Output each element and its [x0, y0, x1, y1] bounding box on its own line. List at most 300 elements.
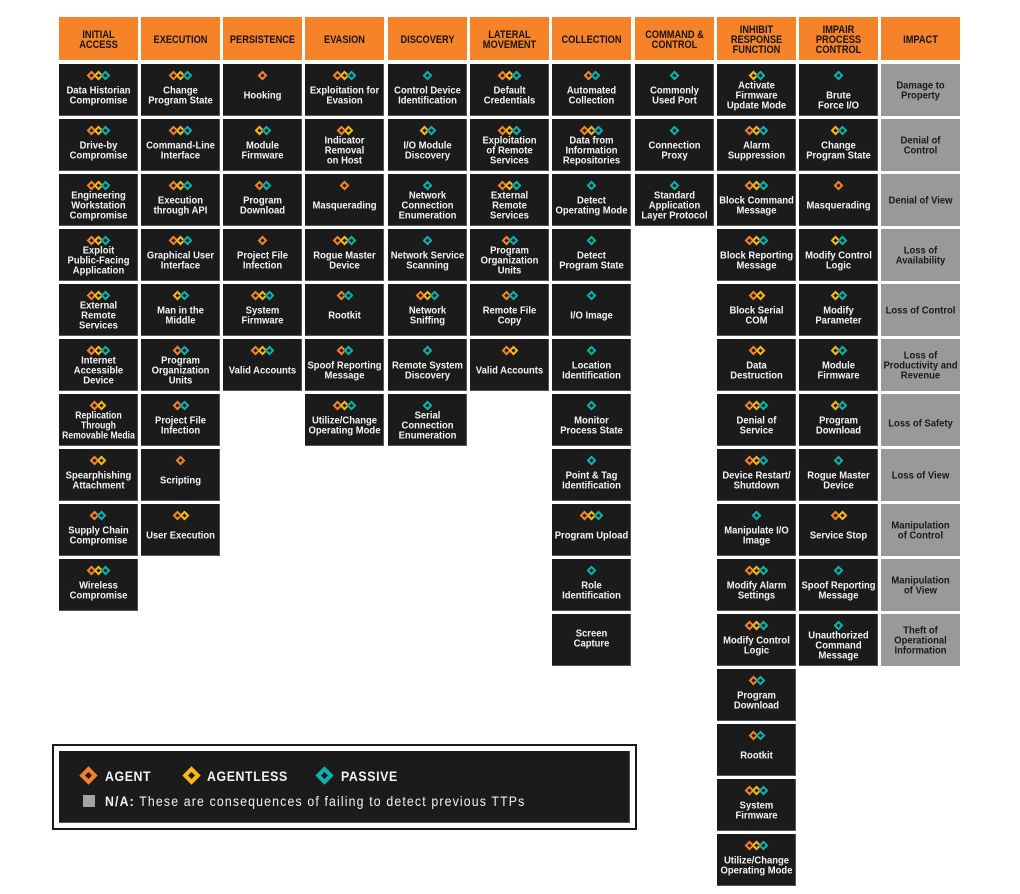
label — [69, 190, 128, 222]
technique: Standard Application Layer Protocol — [635, 174, 714, 226]
technique: Rogue Master Device — [305, 229, 384, 281]
label: Project File — [237, 250, 288, 262]
label: Modify Control — [805, 250, 872, 262]
icons: agent, passive — [470, 235, 549, 245]
technique: Program Download — [799, 394, 878, 446]
header: Command & Control — [635, 17, 714, 60]
label: External — [80, 300, 117, 312]
icons: passive — [388, 400, 467, 410]
technique: Service Stop — [799, 504, 878, 556]
icons: agent, agentless, passive — [470, 180, 549, 190]
consequence: Theft of Operational Information — [881, 614, 960, 666]
label — [878, 350, 964, 380]
technique: Scripting — [141, 449, 220, 501]
technique: Unauthorized Command Message — [799, 614, 878, 666]
label: Removal — [325, 144, 364, 156]
label: Interface — [161, 260, 200, 272]
label — [385, 360, 470, 380]
label: User Execution — [146, 530, 215, 542]
label: Control Device — [394, 84, 461, 96]
icons: passive — [552, 565, 631, 575]
label: Valid Accounts — [476, 364, 543, 376]
column: Impact — [881, 17, 960, 666]
column: Execution — [141, 17, 220, 556]
label: Message — [819, 590, 858, 602]
label: Parameter — [815, 314, 862, 326]
label: Identification — [562, 590, 621, 602]
technique: Denial of Service — [717, 394, 796, 446]
icons: passive — [717, 510, 796, 520]
label: Copy — [498, 314, 521, 326]
icons: passive — [552, 235, 631, 245]
icons: agent, agentless — [799, 510, 878, 520]
label: Update Mode — [727, 100, 786, 112]
label — [385, 306, 470, 326]
icons: agent, agentless, passive — [86, 236, 110, 246]
label: Screen — [576, 628, 608, 640]
label: Control — [904, 144, 938, 156]
technique: Command-Line Interface — [141, 119, 220, 171]
header: Inhibit Response Function: INHIBIT — [740, 24, 773, 36]
icons: passive — [388, 70, 467, 80]
label: Organization — [481, 254, 538, 266]
technique: Rootkit — [717, 724, 796, 776]
technique: Alarm Suppression — [717, 119, 796, 171]
icons: agent, agentless, passive — [717, 620, 796, 630]
icons: agentless, passive — [799, 345, 878, 355]
label: Drive-by — [79, 140, 117, 152]
technique: Program Download — [223, 174, 302, 226]
label: Rogue Master — [807, 470, 870, 482]
label: Device — [330, 260, 360, 272]
icons: agent — [305, 180, 384, 190]
consequence: Loss of Availability — [881, 229, 960, 281]
technique: Program Organization Units — [470, 229, 549, 281]
technique: Valid Accounts — [470, 339, 549, 391]
label: Credentials — [484, 94, 535, 106]
technique: Connection Proxy — [635, 119, 714, 171]
label — [796, 470, 881, 490]
label — [631, 86, 717, 106]
label: Detect — [577, 194, 606, 206]
label: Indicator — [325, 134, 365, 146]
label: Property — [901, 90, 940, 102]
label: Settings — [738, 590, 775, 602]
label: Message — [819, 650, 858, 662]
label: Services — [490, 154, 529, 166]
label: Message — [325, 370, 365, 382]
icons: agent, agentless, passive — [86, 346, 110, 356]
label — [714, 416, 799, 436]
icons: agent, agentless, passive — [717, 125, 796, 135]
technique: Program Organization Units — [141, 339, 220, 391]
header: Collection — [552, 17, 631, 60]
column: Inhibit Response Function — [717, 17, 796, 886]
technique: System Firmware — [223, 284, 302, 336]
icons: agent, agentless, passive — [86, 290, 110, 300]
label — [878, 626, 964, 656]
header: Inhibit Response Function: RESPONSE — [731, 34, 782, 46]
icons: agentless, passive — [799, 125, 878, 135]
label: Operational — [895, 634, 947, 646]
technique: Location Identification — [552, 339, 631, 391]
label: Identification — [398, 94, 457, 106]
label: Module — [246, 140, 279, 152]
icons: agentless, passive — [172, 290, 190, 300]
header: Impact — [881, 17, 960, 60]
label — [714, 306, 799, 326]
label — [220, 196, 305, 216]
label — [302, 360, 388, 380]
label — [714, 636, 799, 656]
technique: Control Device Identification — [388, 64, 467, 116]
label — [68, 524, 128, 546]
technique: Modify Alarm Settings — [717, 559, 796, 611]
label: Spearphishing — [65, 470, 131, 482]
label: Graphical User — [147, 250, 214, 262]
label: Internet — [81, 354, 116, 366]
label: Rootkit — [329, 310, 361, 322]
label: Change — [163, 84, 198, 96]
label: Firmware — [735, 90, 778, 102]
label: Network — [409, 190, 446, 202]
label: Repositories — [563, 154, 620, 166]
label: Program — [490, 244, 529, 256]
technique: Wireless Compromise — [59, 559, 138, 611]
label — [467, 306, 552, 326]
legend text: N/A note: N/A: These are consequences of failing to detect previous TTPs — [105, 793, 525, 809]
label — [220, 306, 305, 326]
label: Device — [83, 374, 113, 386]
header: Persistence: PERSISTENCE — [230, 34, 295, 46]
technique: Data Destruction — [717, 339, 796, 391]
label: Availability — [896, 254, 946, 266]
header: Evasion: EVASION — [324, 34, 365, 46]
label: Scanning — [406, 260, 449, 272]
technique: Remote System Discovery — [388, 339, 467, 391]
icons: passive — [552, 455, 631, 465]
label: Data — [746, 360, 767, 372]
icons: passive — [552, 345, 631, 355]
label: Program State — [559, 260, 624, 272]
label — [467, 86, 552, 106]
technique: Default Credentials — [470, 64, 549, 116]
label — [467, 246, 552, 276]
technique: Module Firmware — [223, 119, 302, 171]
label: Connection — [402, 200, 453, 212]
label: Program State — [148, 94, 213, 106]
technique: Spoof Reporting Message — [799, 559, 878, 611]
icons: agent, agentless, passive — [717, 455, 796, 465]
header: Inhibit Response Function — [717, 17, 796, 60]
label: Program State — [806, 150, 871, 162]
technique: Rootkit — [305, 284, 384, 336]
label — [73, 354, 123, 386]
technique: Project File Infection — [223, 229, 302, 281]
technique: External Remote Services — [59, 284, 138, 336]
technique: Manipulate I/O Image — [717, 504, 796, 556]
label — [69, 580, 128, 602]
label: Modify — [823, 304, 854, 316]
technique: Modify Control Logic — [799, 229, 878, 281]
icons: agent, agentless, passive — [223, 290, 302, 300]
column: Collection — [552, 17, 631, 666]
label — [549, 196, 635, 216]
label: Force I/O — [818, 100, 859, 112]
label: Services — [79, 320, 118, 332]
header: Impair Process Control: CONTROL — [816, 44, 861, 56]
technique: Program Upload — [552, 504, 631, 556]
label: Operating Mode — [721, 864, 792, 876]
icons: passive — [552, 290, 631, 300]
label: Manipulation — [892, 574, 950, 586]
header: Initial Access — [59, 17, 138, 60]
legend text: agent: AGENT — [105, 768, 151, 784]
label: Theft of — [903, 624, 938, 636]
label — [796, 90, 881, 110]
label: Exploitation — [482, 134, 537, 146]
legend icon: agentless — [182, 766, 201, 785]
technique: Network Service Scanning — [388, 229, 467, 281]
label — [220, 140, 305, 160]
label: Firmware — [735, 810, 778, 822]
label: Modify Control — [723, 634, 790, 646]
label: Project File — [155, 414, 206, 426]
label: Attachment — [72, 480, 124, 492]
label: System — [246, 304, 279, 316]
label: Services — [490, 210, 529, 222]
label: Masquerading — [806, 200, 871, 212]
icons: agent, passive — [172, 346, 190, 356]
icons: passive — [635, 125, 714, 135]
label — [549, 416, 635, 436]
label: Infection — [161, 424, 200, 436]
header: Impair Process Control: IMPAIR — [823, 24, 854, 36]
label — [467, 190, 552, 220]
icons: passive — [635, 70, 714, 80]
label: Remote — [492, 200, 527, 212]
column: Persistence — [223, 17, 302, 391]
label: I/O Image — [571, 310, 613, 322]
label: Role — [582, 580, 602, 592]
label: Identification — [562, 370, 621, 382]
consequence: Loss of Productivity and Revenue — [881, 339, 960, 391]
technique: Role Identification — [552, 559, 631, 611]
label — [385, 190, 470, 220]
technique: Indicator Removal on Host — [305, 119, 384, 171]
icons: agent, passive — [305, 345, 384, 355]
label: Denial of — [901, 134, 941, 146]
label: Logic — [826, 260, 851, 272]
icons: agent, agentless, passive — [717, 565, 796, 575]
technique: Detect Operating Mode — [552, 174, 631, 226]
label: Utilize/Change — [312, 414, 377, 426]
consequence: Loss of View — [881, 449, 960, 501]
label — [878, 576, 964, 596]
label: Connection — [648, 140, 700, 152]
consequence: Denial of View — [881, 174, 960, 226]
label: Spoof Reporting — [308, 360, 382, 372]
label — [69, 140, 128, 162]
label: Middle — [166, 314, 195, 326]
label: Execution — [158, 194, 203, 206]
label — [878, 246, 964, 266]
label: Replication — [75, 410, 121, 422]
icons: passive — [799, 70, 878, 80]
technique: Data from Information Repositories — [552, 119, 631, 171]
label: Device — [823, 480, 854, 492]
icons: agentless, passive — [799, 235, 878, 245]
label: Standard — [654, 190, 695, 202]
consequence: Damage to Property — [881, 64, 960, 116]
technique: System Firmware — [717, 779, 796, 831]
label — [796, 140, 881, 160]
label — [79, 300, 118, 332]
header: Impair Process Control: PROCESS — [816, 34, 861, 46]
icons: agent, agentless — [717, 345, 796, 355]
icons: agent, agentless, passive — [717, 235, 796, 245]
label: Image — [743, 534, 770, 546]
label: Discovery — [405, 150, 450, 162]
technique: Commonly Used Port — [635, 64, 714, 116]
label: Alarm — [743, 140, 770, 152]
technique: Change Program State — [141, 64, 220, 116]
label: Infection — [243, 260, 282, 272]
icons: passive — [635, 180, 714, 190]
legend swatch: N/A — [83, 795, 95, 807]
technique: Valid Accounts — [223, 339, 302, 391]
technique: I/O Image — [552, 284, 631, 336]
label: Compromise — [69, 150, 127, 162]
icons: agent, agentless, passive — [717, 785, 796, 795]
label — [714, 856, 799, 876]
label: Network — [409, 304, 446, 316]
icons: passive — [552, 180, 631, 190]
icons: agent — [799, 180, 878, 190]
consequence: Loss of Control — [881, 284, 960, 336]
label: Loss of — [904, 244, 938, 256]
label: Brute — [826, 90, 851, 102]
technique: Utilize/Change Operating Mode — [717, 834, 796, 886]
icons: agentless, passive — [799, 400, 878, 410]
consequence: Manipulation of Control — [881, 504, 960, 556]
label — [157, 304, 204, 326]
label: Unauthorized — [808, 630, 869, 642]
label: Engineering — [71, 190, 125, 202]
consequence: Loss of Safety — [881, 394, 960, 446]
label: Data from — [570, 134, 614, 146]
label: Productivity and — [884, 360, 958, 372]
label — [631, 190, 717, 220]
label: Remote File — [483, 304, 536, 316]
label: Denial of — [737, 414, 776, 426]
legend text: agentless: AGENTLESS — [207, 768, 288, 784]
technique: Project File Infection — [141, 394, 220, 446]
technique: Network Connection Enumeration — [388, 174, 467, 226]
technique: Drive-by Compromise — [59, 119, 138, 171]
technique: Rogue Master Device — [799, 449, 878, 501]
label: Location — [572, 360, 611, 372]
label: Command — [815, 640, 862, 652]
label: Exploit — [82, 244, 114, 256]
technique: Spearphishing Attachment — [59, 449, 138, 501]
label: Logic — [744, 644, 769, 656]
technique: Hooking — [223, 64, 302, 116]
label: Layer Protocol — [641, 210, 707, 222]
label — [302, 250, 388, 270]
column: Discovery — [388, 17, 467, 446]
legend icon: passive — [315, 766, 334, 785]
label — [714, 800, 799, 820]
label: Evasion — [327, 94, 363, 106]
column: Impair Process Control — [799, 17, 878, 666]
label: Data Historian — [66, 84, 130, 96]
icons: passive — [388, 345, 467, 355]
icons: agent, agentless, passive — [305, 70, 384, 80]
header: Impact: IMPACT — [903, 34, 938, 46]
label — [549, 136, 635, 166]
label — [878, 80, 964, 100]
label: Scripting — [160, 474, 201, 486]
icons: agent, passive — [172, 400, 190, 410]
label: Firmware — [241, 314, 284, 326]
label: Enumeration — [399, 210, 456, 222]
label — [385, 86, 470, 106]
icons: agent, passive — [305, 290, 384, 300]
label: Sniffing — [410, 314, 445, 326]
icons: agent, agentless — [90, 456, 106, 466]
technique: Screen Capture — [552, 614, 631, 666]
label: Service Stop — [810, 530, 867, 542]
icons: passive — [799, 455, 878, 465]
icons: agent, agentless — [172, 510, 190, 520]
technique: Automated Collection — [552, 64, 631, 116]
label: Connection — [402, 420, 453, 432]
legend panel — [52, 744, 637, 830]
technique: Execution through API — [141, 174, 220, 226]
label: Download — [240, 204, 285, 216]
icons: agent, agentless, passive — [470, 70, 549, 80]
legend icon: agent — [79, 766, 98, 785]
label: Loss of Control — [886, 304, 956, 316]
label: Collection — [569, 94, 615, 106]
icons: agent, agentless — [470, 345, 549, 355]
label: Message — [737, 260, 776, 272]
label: Manipulation — [892, 520, 950, 532]
icons: agent, agentless, passive — [717, 180, 796, 190]
label: Identification — [562, 480, 621, 492]
label: External — [491, 190, 528, 202]
technique: Block Reporting Message — [717, 229, 796, 281]
label — [796, 250, 881, 270]
icons: agent, agentless — [717, 290, 796, 300]
label — [549, 250, 635, 270]
label — [796, 416, 881, 436]
label: on Host — [327, 154, 362, 166]
icons: agent, passive — [717, 730, 796, 740]
header: Lateral Movement: MOVEMENT — [483, 39, 536, 51]
label: Module — [822, 360, 855, 372]
label — [549, 470, 635, 490]
label: Automated — [567, 84, 616, 96]
technique: I/O Module Discovery — [388, 119, 467, 171]
label: Change — [821, 140, 856, 152]
label: Interface — [161, 150, 200, 162]
label — [796, 580, 881, 600]
label — [549, 360, 635, 380]
icons: agent, agentless, passive — [223, 345, 302, 355]
label — [878, 520, 964, 540]
